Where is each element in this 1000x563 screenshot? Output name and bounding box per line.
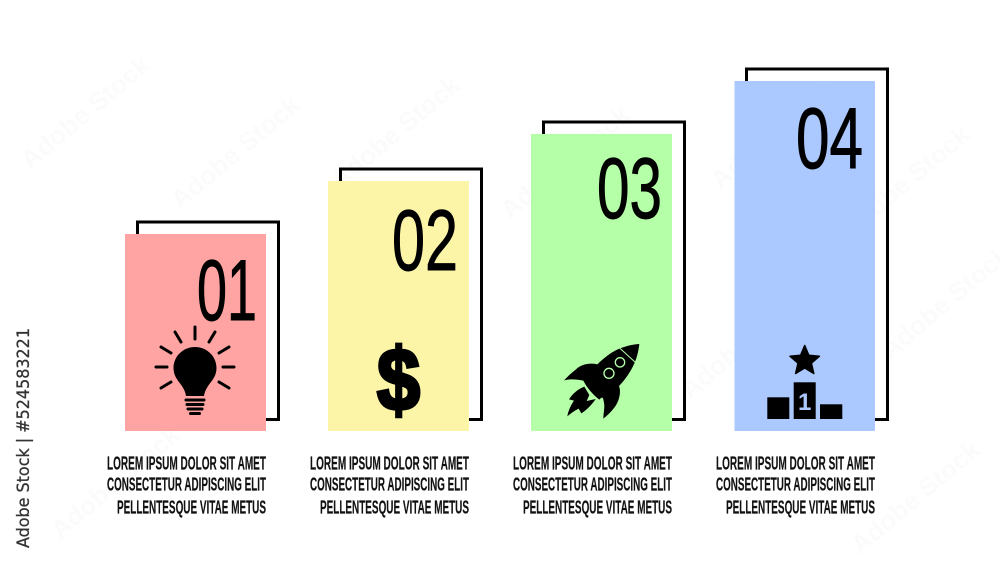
outline frame 02 <box>340 169 482 420</box>
icon: podium with star: 1 <box>798 389 811 416</box>
caption 01: PELLENTESQUE VITAE METUS <box>117 498 266 518</box>
panel: step 02 <box>310 169 482 518</box>
colour block 01 <box>125 234 266 431</box>
number 01: 01 <box>197 243 257 339</box>
number 03: 03 <box>597 141 662 237</box>
caption 04: LOREM IPSUM DOLOR SIT AMET <box>716 454 875 474</box>
caption 01: LOREM IPSUM DOLOR SIT AMET <box>107 454 266 474</box>
caption 01 <box>107 454 266 518</box>
caption 04: PELLENTESQUE VITAE METUS <box>726 498 875 518</box>
caption 04: CONSECTETUR ADIPISCING ELIT <box>716 474 875 494</box>
stock credit: Adobe Stock | #524583221 <box>14 328 34 548</box>
panel: step 04 <box>716 69 888 518</box>
icon: rocket <box>564 344 639 419</box>
number 02: 02 <box>392 193 458 289</box>
outline frame 01 <box>138 222 278 420</box>
icon: light bulb <box>156 327 234 414</box>
icon: dollar sign: $ <box>377 330 420 429</box>
caption 03 <box>513 454 672 518</box>
panel: step 03 <box>513 122 684 518</box>
outline frame 04 <box>746 69 888 420</box>
colour block 04 <box>734 81 875 431</box>
caption 02: LOREM IPSUM DOLOR SIT AMET <box>310 454 469 474</box>
caption 03: LOREM IPSUM DOLOR SIT AMET <box>513 454 672 474</box>
outline frame 03 <box>544 122 684 420</box>
number 04: 04 <box>796 91 863 187</box>
colour block 02 <box>328 181 469 431</box>
caption 02 <box>310 454 469 518</box>
caption 03: PELLENTESQUE VITAE METUS <box>523 498 672 518</box>
panel: step 01 <box>107 222 278 518</box>
icon: podium with star <box>767 346 842 419</box>
caption 03: CONSECTETUR ADIPISCING ELIT <box>513 474 672 494</box>
caption 04 <box>716 454 875 518</box>
caption 02: CONSECTETUR ADIPISCING ELIT <box>310 474 469 494</box>
caption 01: CONSECTETUR ADIPISCING ELIT <box>107 474 266 494</box>
caption 02: PELLENTESQUE VITAE METUS <box>320 498 469 518</box>
colour block 03 <box>531 134 672 431</box>
